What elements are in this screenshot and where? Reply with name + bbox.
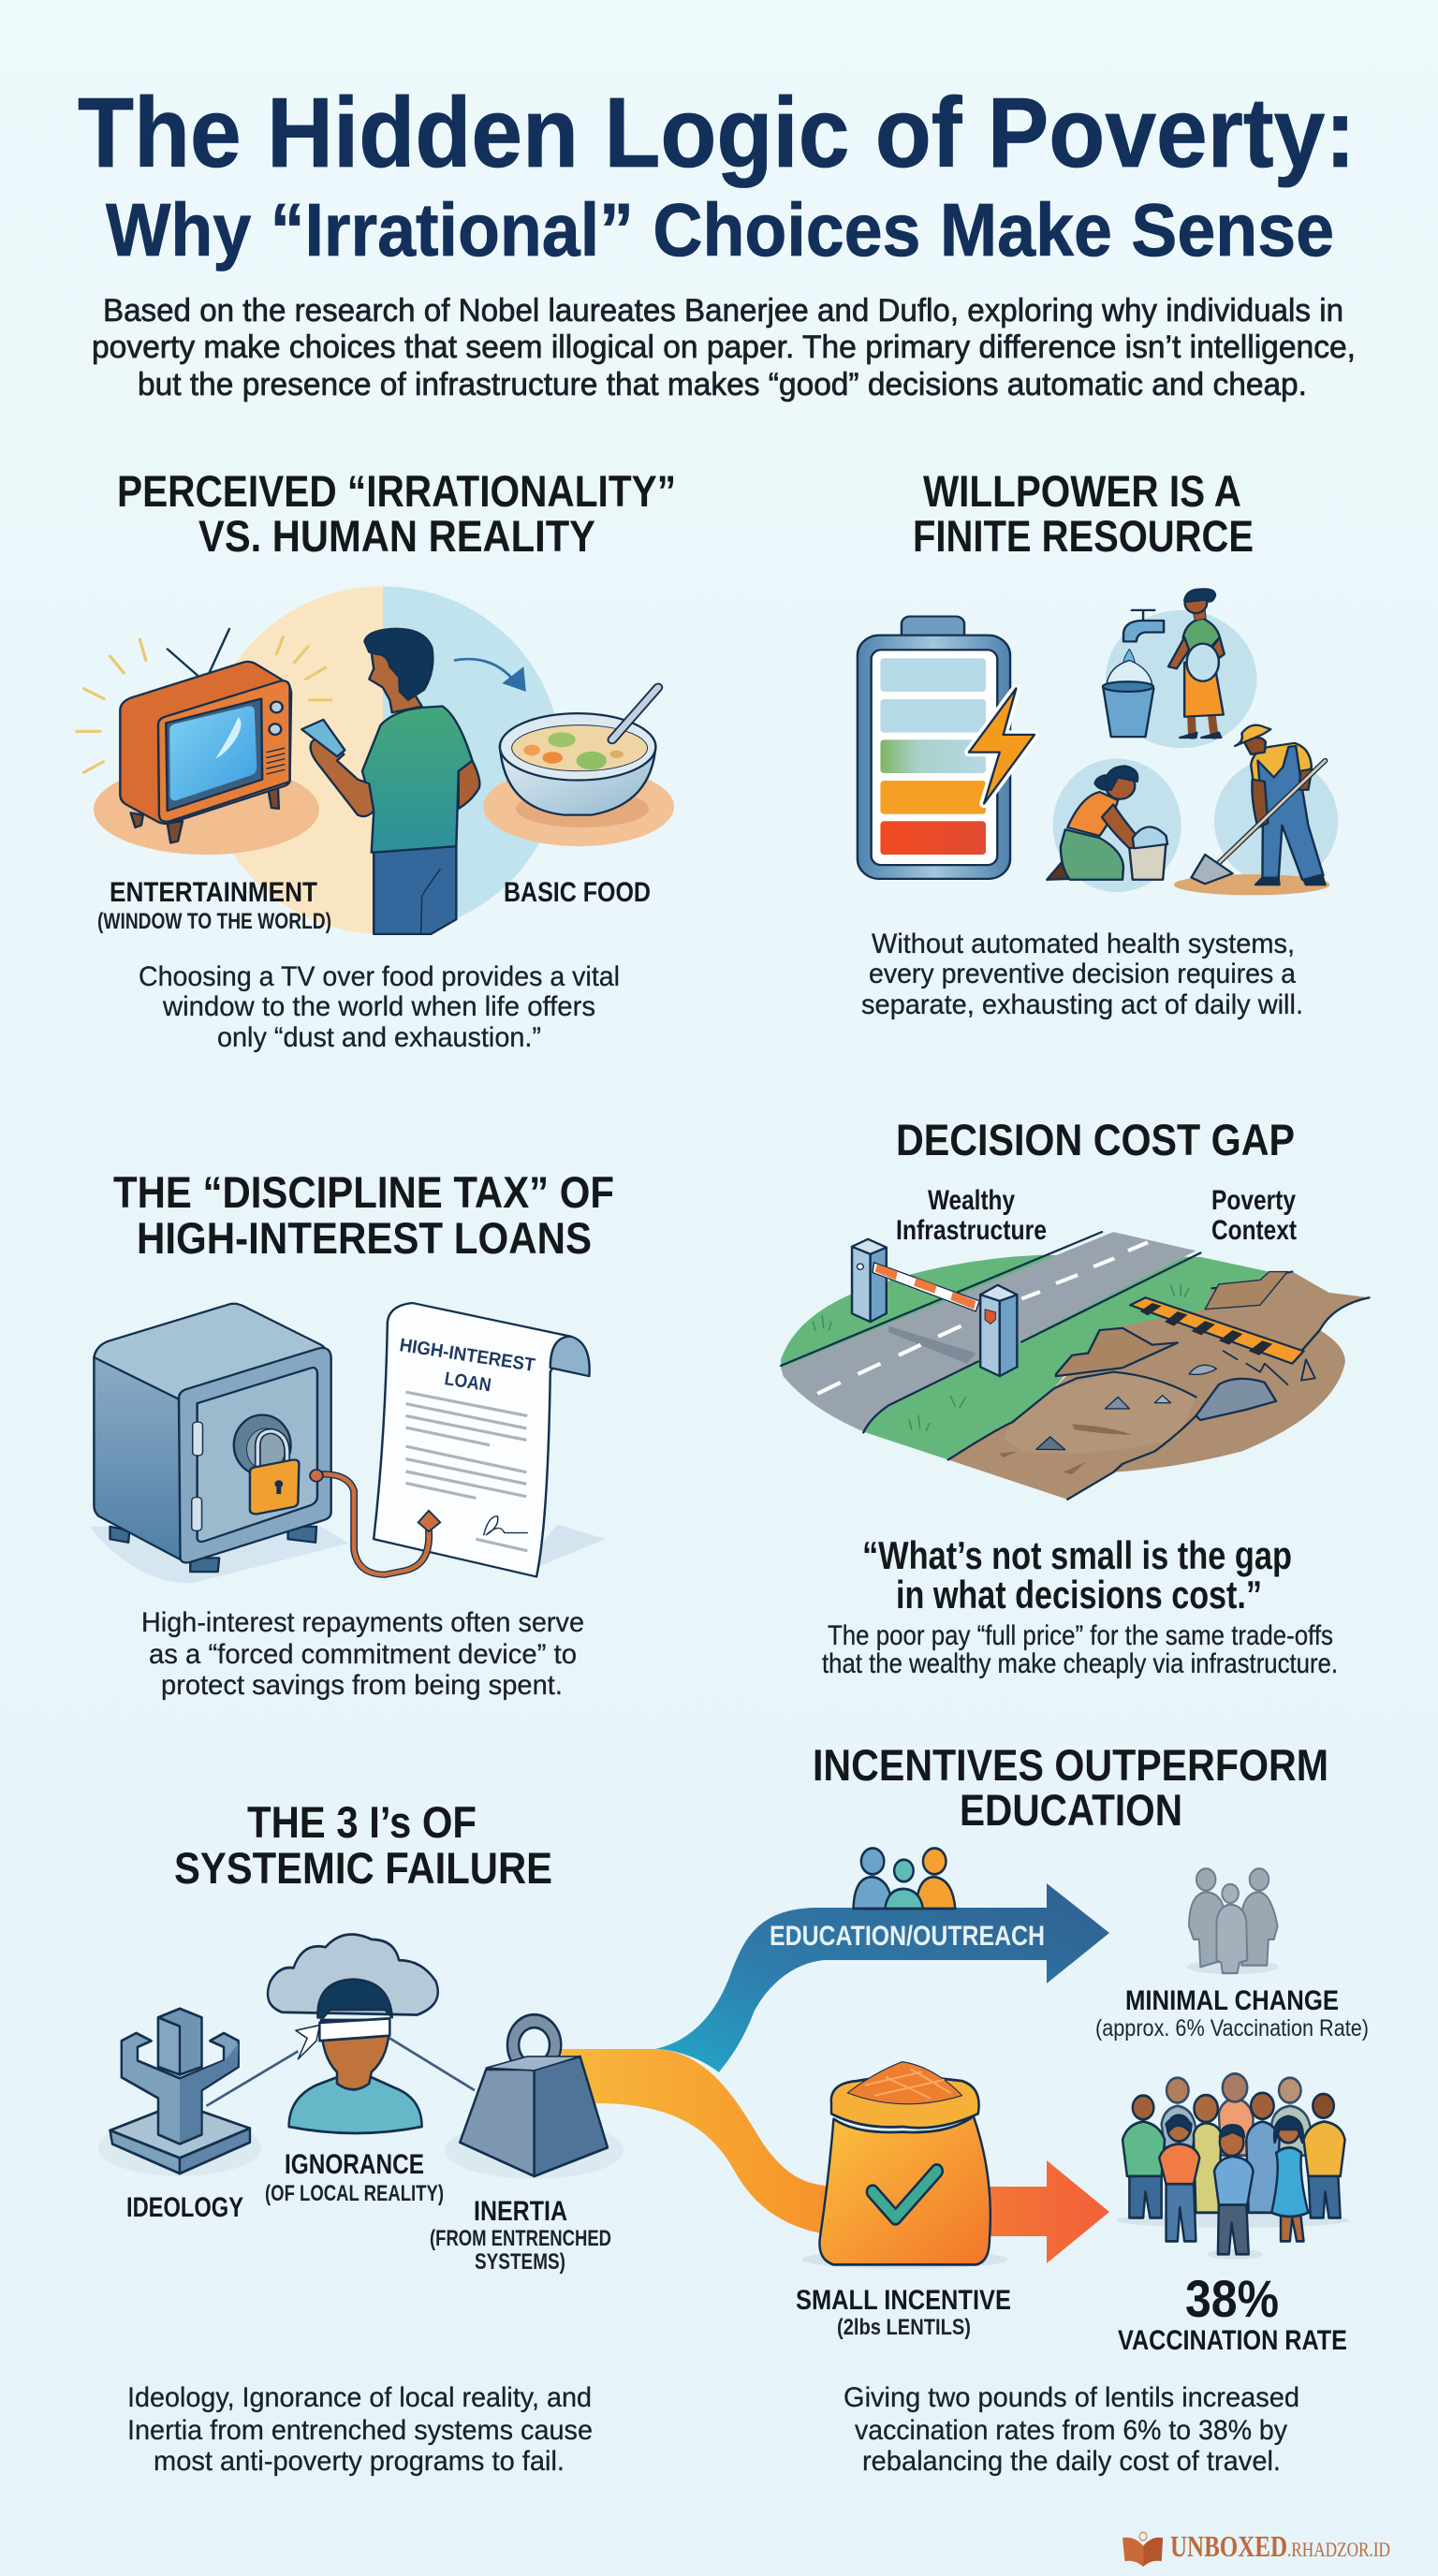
label: minimal change (1095, 1985, 1369, 2042)
pull quote: in what decisions cost.” (896, 1573, 1262, 1617)
illustration: split circle background (94, 586, 674, 934)
heading: perceived irrationality (117, 466, 676, 561)
body text: High-interest repayments often serve (141, 1607, 584, 1638)
heading: 3 I's (174, 1797, 552, 1893)
label: ideology: IDEOLOGY (126, 2192, 243, 2223)
icon: woman kneeling (1047, 758, 1181, 892)
icon: sack of lentils (801, 2062, 1008, 2269)
pull quote: “What’s not small is the gap (862, 1533, 1292, 1577)
body text: Giving two pounds of lentils increased (844, 2382, 1299, 2413)
heading: discipline tax: HIGH-INTEREST LOANS (137, 1213, 592, 1263)
statistic: 38 percent: 38% (1185, 2269, 1279, 2328)
body text: rebalancing the daily cost of travel. (862, 2446, 1281, 2477)
label: basic food: BASIC FOOD (504, 877, 651, 908)
body text (844, 2382, 1299, 2477)
panel: incentives outperform education (796, 1740, 1369, 2477)
icon: loan document (374, 1303, 606, 1576)
intro paragraph: Based on the research of Nobel laureates Banerjee and Duflo, exploring why individuals in (103, 293, 1343, 329)
body text: Inertia from entrenched systems cause (127, 2415, 593, 2446)
body text: protect savings from being spent. (161, 1670, 563, 1701)
icon: ideology monument (98, 2009, 261, 2176)
body text: every preventive decision requires a (869, 959, 1296, 989)
label: minimal change: (approx. 6% Vaccination Rate) (1095, 2015, 1369, 2042)
intro paragraph: poverty make choices that seem illogical on paper. The primary difference isn’t intelligence, (92, 329, 1356, 365)
icon: inertia weight (445, 2021, 624, 2179)
arrow: education path (655, 1883, 1109, 2072)
label: inertia: (FROM ENTRENCHED (430, 2226, 611, 2251)
label: entertainment: (WINDOW TO THE WORLD) (97, 909, 331, 934)
icon: bowl of food (500, 687, 658, 815)
label: ignorance: (OF LOCAL REALITY) (265, 2181, 444, 2206)
body text: Without automated health systems, (872, 929, 1295, 959)
icon: person with phone (301, 629, 479, 934)
body text: Ideology, Ignorance of local reality, and (127, 2382, 592, 2413)
logo: unboxed rhadzor: UNBOXED (1170, 2529, 1287, 2563)
heading: discipline tax: THE “DISCIPLINE TAX” OF (113, 1167, 614, 1217)
icon: grey group with minimal change (1187, 1868, 1279, 1974)
label: inertia: INERTIA (474, 2196, 567, 2227)
heading: willpower: WILLPOWER IS A (923, 466, 1241, 516)
body text (127, 2382, 593, 2477)
label: small incentive: SMALL INCENTIVE (796, 2285, 1011, 2316)
intro paragraph: but the presence of infrastructure that makes “good” decisions automatic and cheap. (138, 367, 1307, 402)
label: small incentive: (2lbs LENTILS) (837, 2315, 971, 2340)
heading: incentives: INCENTIVES OUTPERFORM (813, 1740, 1328, 1790)
body text: vaccination rates from 6% to 38% by (855, 2415, 1287, 2446)
heading: incentives: EDUCATION (960, 1785, 1182, 1835)
icon: blindfolded person under cloud (268, 1935, 438, 2133)
panel: discipline tax (90, 1167, 614, 1701)
heading: incentives (813, 1740, 1328, 1835)
title (78, 78, 1356, 271)
label: wealthy infrastructure: Wealthy (928, 1185, 1015, 1216)
heading: willpower (913, 466, 1254, 561)
logo: unboxed rhadzor: .RHADZOR.ID (1287, 2538, 1390, 2561)
heading: discipline tax (113, 1167, 614, 1263)
heading: 3 I's: SYSTEMIC FAILURE (174, 1843, 552, 1893)
icon: locked safe (90, 1304, 348, 1583)
label: poverty context: Context (1211, 1215, 1297, 1246)
heading: willpower: FINITE RESOURCE (913, 511, 1254, 561)
pull quote (862, 1533, 1292, 1617)
icon: outreach group (854, 1849, 955, 1909)
label: inertia: SYSTEMS) (475, 2249, 565, 2275)
connector: hose linking safe and loan (310, 1470, 440, 1574)
heading: 3 I's: THE 3 I’s OF (247, 1797, 477, 1847)
label: ignorance (265, 2149, 444, 2206)
statistic: 38 percent (1118, 2269, 1347, 2356)
label: inertia (430, 2196, 611, 2275)
label: entertainment (97, 877, 331, 934)
title: Why “Irrational” Choices Make Sense (106, 188, 1334, 271)
icon: man digging (1174, 725, 1338, 895)
logo: unboxed rhadzor (1123, 2529, 1390, 2567)
body text (822, 1620, 1338, 1679)
heading: perceived irrationality: PERCEIVED “IRRATIONALITY” (117, 466, 676, 516)
icon: depleting battery (858, 617, 1034, 879)
body text (861, 929, 1303, 1020)
statistic: 38 percent: VACCINATION RATE (1118, 2325, 1347, 2356)
heading: decision cost gap: DECISION COST GAP (896, 1115, 1295, 1164)
illustration: road versus broken path (781, 1232, 1370, 1500)
panel: willpower (858, 466, 1338, 1020)
panel: perceived irrationality (77, 466, 676, 1053)
body text: only “dust and exhaustion.” (217, 1022, 541, 1053)
arrow: education path: EDUCATION/OUTREACH (770, 1921, 1045, 1952)
body text (141, 1607, 584, 1701)
intro paragraph (92, 293, 1356, 402)
label: minimal change: MINIMAL CHANGE (1125, 1985, 1339, 2016)
body text: Choosing a TV over food provides a vital (139, 961, 620, 992)
icon: arrow to food (454, 659, 526, 692)
label: poverty context: Poverty (1211, 1185, 1296, 1216)
icon: open book (1123, 2532, 1163, 2567)
panel: decision cost gap (781, 1115, 1370, 1679)
label: ignorance: IGNORANCE (285, 2149, 424, 2180)
icon: loan document: LOAN (443, 1368, 492, 1397)
body text: most anti-poverty programs to fail. (154, 2446, 565, 2477)
title: The Hidden Logic of Poverty: (78, 78, 1356, 188)
label: entertainment: ENTERTAINMENT (110, 877, 317, 908)
icon: television (77, 629, 331, 843)
icon: large vaccinated crowd (1116, 2073, 1349, 2260)
body text: that the wealthy make cheaply via infrastructure. (822, 1648, 1338, 1679)
body text: The poor pay “full price” for the same trade-offs (828, 1620, 1333, 1651)
label: poverty context (1211, 1185, 1297, 1246)
panel: the 3 I's (98, 1797, 624, 2477)
body text (139, 961, 620, 1053)
body text: separate, exhausting act of daily will. (861, 989, 1303, 1020)
icon: loan document: HIGH-INTEREST (398, 1335, 536, 1376)
body text: as a “forced commitment device” to (149, 1639, 577, 1670)
label: wealthy infrastructure: Infrastructure (896, 1215, 1047, 1246)
heading: perceived irrationality: VS. HUMAN REALITY (198, 511, 595, 561)
arrow: incentive path (562, 2049, 1109, 2263)
label: small incentive (796, 2285, 1011, 2340)
body text: window to the world when life offers (162, 991, 595, 1022)
label: wealthy infrastructure (896, 1185, 1047, 1246)
connector lines between the three I's (206, 2039, 475, 2106)
icon: woman fetching water (1103, 589, 1257, 748)
